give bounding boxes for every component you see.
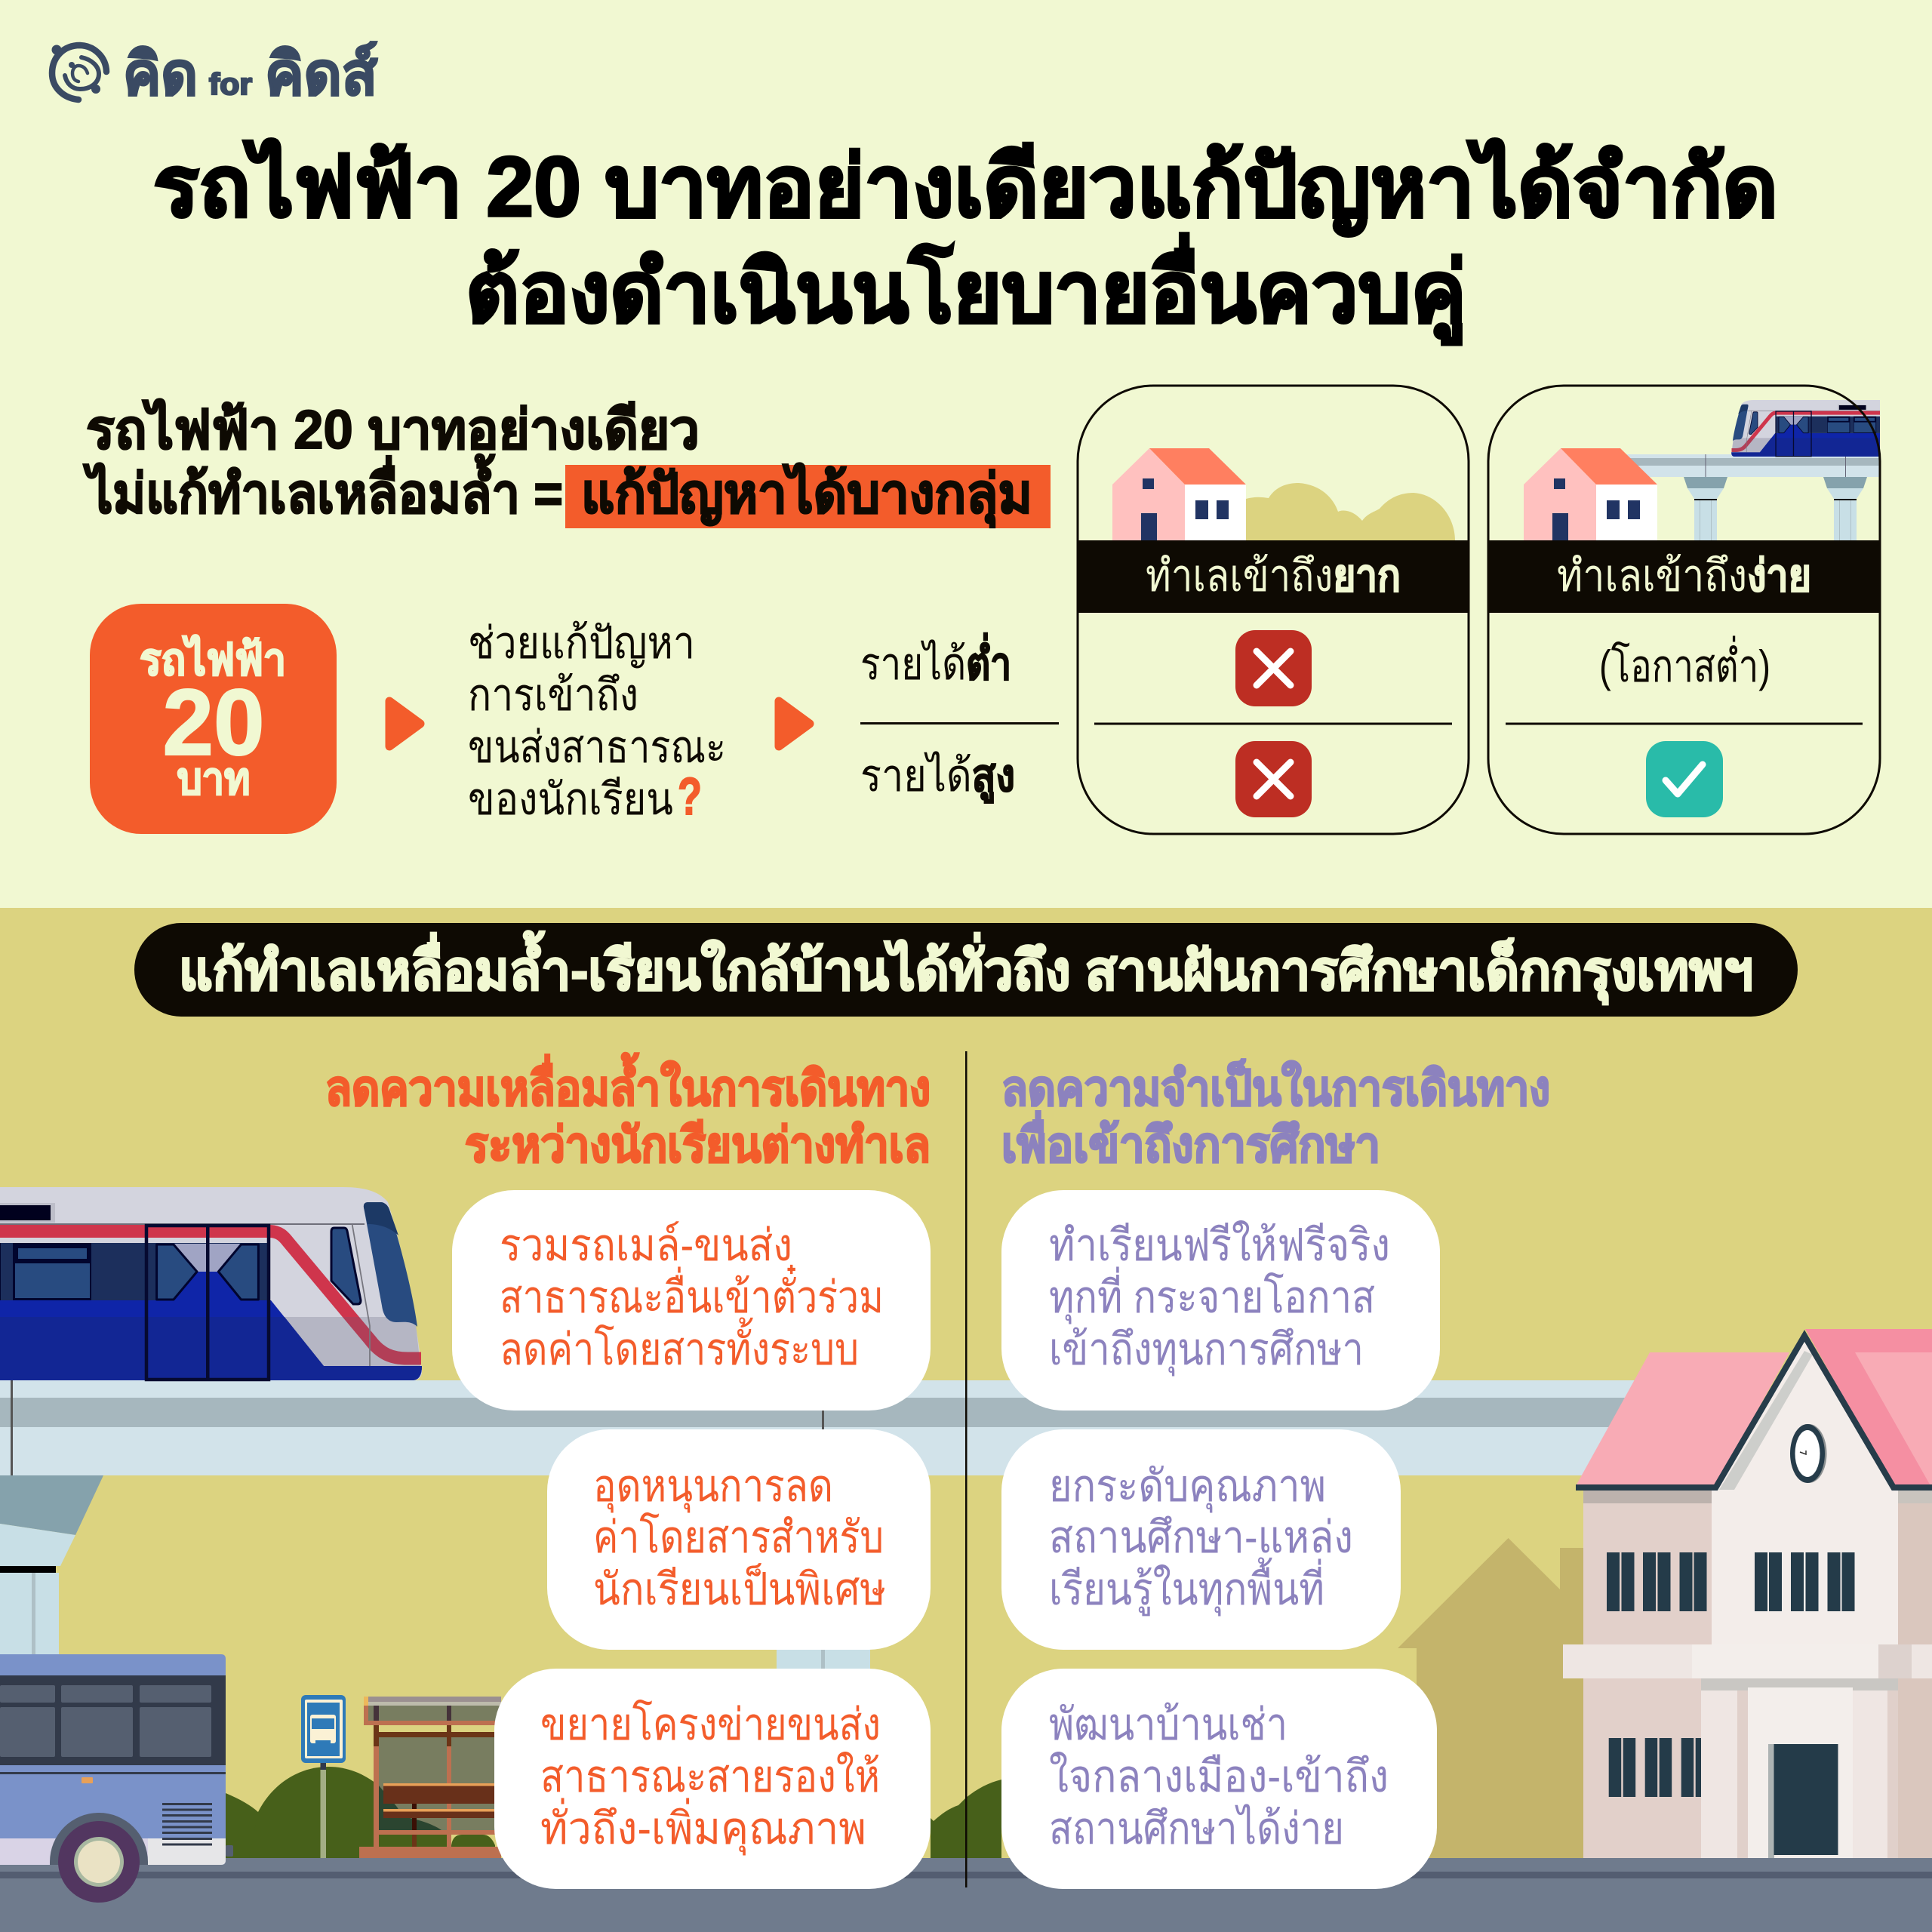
viaduct xyxy=(0,1380,1736,1675)
lower windows xyxy=(1609,1738,1702,1797)
card: free education: ทุกที่ กระจายโอกาส xyxy=(1049,1266,1375,1324)
card: student subsidy: อุดหนุนการลด xyxy=(593,1461,833,1513)
question text: ของนักเรียน xyxy=(468,774,673,824)
title: รถไฟฟ้า 20 บาทอย่างเดียวแก้ปัญหาได้จำกัด xyxy=(153,139,1778,237)
title: ต้องดำเนินนโยบายอื่นควบคู่ xyxy=(466,232,1466,345)
card: school quality: เรียนรู้ในทุกพื้นที่ xyxy=(1049,1557,1324,1617)
side windows xyxy=(13,1243,91,1300)
portico xyxy=(1701,1678,1898,1690)
card: student subsidy xyxy=(547,1429,931,1650)
label band xyxy=(1488,540,1880,613)
question text: ? xyxy=(678,767,702,826)
question text xyxy=(468,618,726,826)
bus shelter xyxy=(359,1697,501,1858)
upper windows xyxy=(1607,1552,1855,1611)
destination display xyxy=(0,1203,55,1223)
card: school quality: ยกระดับคุณภาพ xyxy=(1049,1461,1326,1513)
panel: easy to access location xyxy=(1488,386,1884,834)
column headings left: ลดความเหลื่อมล้ำในการเดินทาง xyxy=(325,1053,931,1115)
card: feeder network xyxy=(494,1669,931,1889)
title xyxy=(153,139,1778,345)
panel: hard to access location xyxy=(1078,386,1469,834)
school background silhouette xyxy=(1398,1538,1583,1858)
subheading: รถไฟฟ้า 20 บาทอย่างเดียว xyxy=(86,398,700,460)
logo wordmark: for xyxy=(209,68,252,101)
red stripe xyxy=(0,1232,421,1358)
door panes xyxy=(174,1244,242,1272)
panel: 20 baht badge: บาท xyxy=(177,755,251,804)
school xyxy=(1563,1329,1932,1858)
card: feeder network: ทั่วถึง-เพิ่มคุณภาพ xyxy=(540,1798,866,1856)
label band: ทำเลเข้าถึงยาก xyxy=(1146,551,1401,601)
column headings left xyxy=(325,1053,931,1172)
low opportunity text: (โอกาสต่ำ) xyxy=(1599,635,1770,691)
arrow 1 xyxy=(389,701,420,746)
panel: 20 baht badge xyxy=(90,604,337,834)
income row labels xyxy=(860,632,1059,803)
road xyxy=(0,1858,1932,1932)
card: school quality xyxy=(1001,1429,1401,1650)
card: student subsidy: นักเรียนเป็นพิเศษ xyxy=(593,1563,886,1614)
card: free education: ทำเรียนฟรีให้ฟรีจริง xyxy=(1049,1220,1390,1270)
logo wordmark: คิด xyxy=(123,41,198,107)
top background xyxy=(0,0,1932,908)
card: feeder network: สาธารณะสายรองให้ xyxy=(540,1751,880,1801)
income row labels: รายได้สูง xyxy=(860,750,1015,803)
bushes behind bus stop xyxy=(226,1767,495,1858)
column headings right: เพื่อเข้าถึงการศึกษา xyxy=(1001,1111,1380,1172)
door xyxy=(1768,1744,1774,1858)
card: school quality: สถานศึกษา-แหล่ง xyxy=(1049,1512,1353,1562)
question text: ช่วยแก้ปัญหา xyxy=(468,618,695,668)
viaduct mini xyxy=(1623,454,1880,540)
card: rental housing xyxy=(1001,1669,1437,1889)
question text: ขนส่งสาธารณะ xyxy=(468,722,726,772)
card: rental housing: สถานศึกษาได้ง่าย xyxy=(1049,1803,1344,1854)
subheading xyxy=(83,398,1051,528)
icon: logo spiral xyxy=(51,45,106,100)
icon: house with bushes xyxy=(1112,448,1455,540)
card: joint ticket: สาธารณะอื่นเข้าตั๋วร่วม xyxy=(500,1264,884,1322)
icon: cross xyxy=(1235,630,1312,706)
icon: mini train xyxy=(1731,400,1884,457)
column headings left: ระหว่างนักเรียนต่างทำเล xyxy=(465,1118,931,1172)
label band xyxy=(1078,540,1469,613)
ledge xyxy=(1563,1644,1692,1678)
column headings right xyxy=(1001,1060,1550,1172)
question text: การเข้าถึง xyxy=(468,670,638,720)
column headings right: ลดความจำเป็นในการเดินทาง xyxy=(1001,1060,1550,1115)
big train xyxy=(0,1187,422,1380)
panel: 20 baht badge: 20 xyxy=(163,671,264,775)
card: free education: เข้าถึงทุนการศึกษา xyxy=(1049,1324,1364,1377)
card: joint ticket: ลดค่าโดยสารทั้งระบบ xyxy=(500,1317,859,1374)
logo xyxy=(51,41,377,107)
subheading: ไม่แก้ทำเลเหลื่อมล้ำ = xyxy=(83,454,563,525)
cab side window xyxy=(331,1228,361,1304)
highlight: partial solution: แก้ปัญหาได้บางกลุ่ม xyxy=(581,462,1032,528)
card: rental housing: ใจกลางเมือง-เข้าถึง xyxy=(1049,1751,1389,1801)
bus stop sign xyxy=(301,1695,346,1858)
arrow 2 xyxy=(779,701,810,746)
icon: check xyxy=(1646,741,1723,817)
card: rental housing: พัฒนาบ้านเช่า xyxy=(1049,1700,1287,1749)
windshield xyxy=(364,1202,417,1327)
logo wordmark xyxy=(123,41,377,107)
icon: cross xyxy=(1235,741,1312,817)
banner xyxy=(134,923,1798,1017)
lower shadow xyxy=(285,1317,420,1366)
income row labels: รายได้ต่ำ xyxy=(860,632,1011,689)
small bushes centre xyxy=(931,1780,1001,1858)
card: student subsidy: ค่าโดยสารสำหรับ xyxy=(593,1512,884,1562)
centre divider xyxy=(965,1051,968,1887)
label band: ทำเลเข้าถึงง่าย xyxy=(1557,551,1811,601)
logo wordmark: คิดส์ xyxy=(265,41,377,107)
bus xyxy=(0,1654,233,1903)
panel: 20 baht badge: รถไฟฟ้า xyxy=(140,635,286,685)
clock xyxy=(1790,1424,1826,1483)
card: free education xyxy=(1001,1190,1440,1411)
bottom background xyxy=(0,908,1932,1932)
card: feeder network: ขยายโครงข่ายขนส่ง xyxy=(540,1699,881,1749)
icon: house xyxy=(1524,448,1657,540)
banner: แก้ทำเลเหลื่อมล้ำ-เรียนใกล้บ้านได้ทั่วถึง สานฝันการศึกษาเด็กกรุงเทพฯ xyxy=(179,931,1753,1005)
card: joint ticket: รวมรถเมล์-ขนส่ง xyxy=(500,1220,792,1270)
card: joint ticket xyxy=(452,1190,931,1411)
